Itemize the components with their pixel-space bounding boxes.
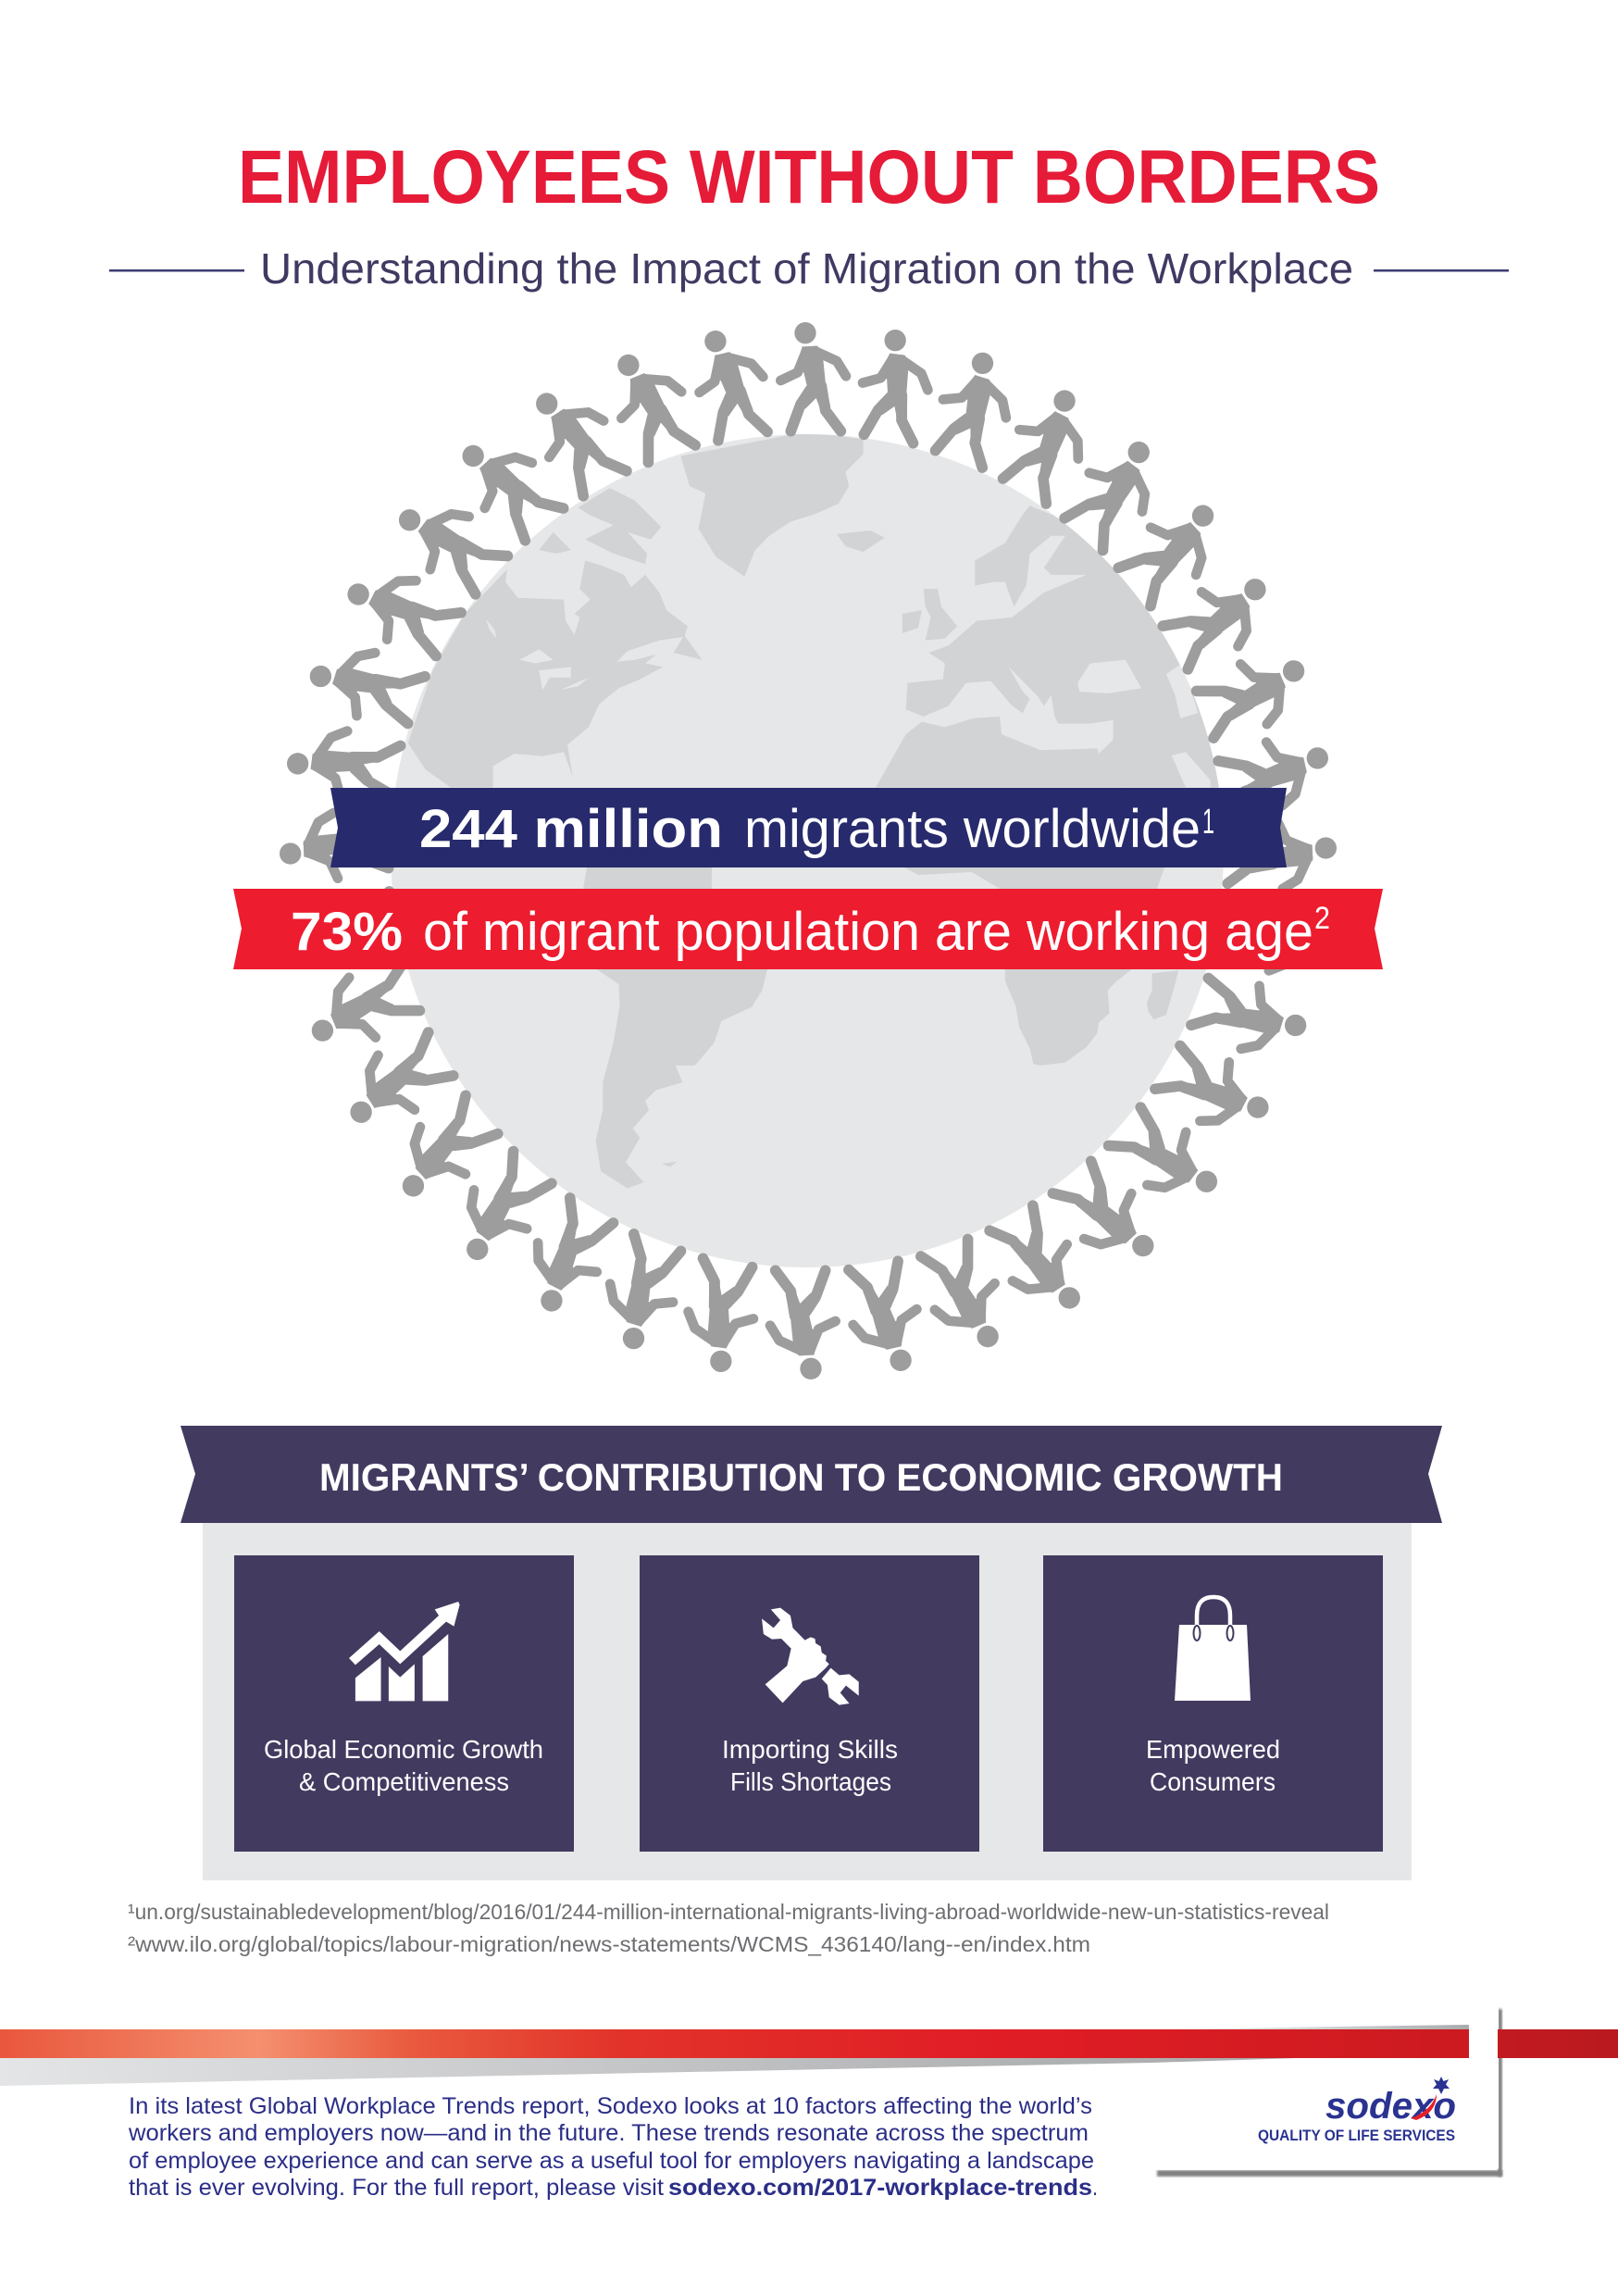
icon: shopping bag xyxy=(1175,1597,1251,1701)
sodexo logo: sodexo xyxy=(1326,2086,1456,2127)
banner: 244 million migrants: 1 xyxy=(1202,803,1214,842)
card: empowered consumers xyxy=(1043,1555,1383,1852)
sodexo logo xyxy=(1258,2077,1456,2144)
red footer bar, right segment xyxy=(1498,2029,1618,2058)
card: empowered consumers: Consumers xyxy=(1150,1767,1276,1796)
subtitle with side rules: Understanding the Impact of Migration on the Workplace xyxy=(260,244,1353,293)
footer paragraph: that is ever evolving. For the full report, please visit xyxy=(129,2175,664,2201)
banner: 244 million migrants: 244 million xyxy=(419,799,723,859)
icon: hand with wrench xyxy=(762,1608,859,1705)
card: importing skills: Fills Shortages xyxy=(730,1767,891,1796)
footnotes: ¹un.org/sustainabledevelopment/blog/2016/01/244-million-international-migrants-living-abroad-worldwide-new-un-statistics-reveal xyxy=(128,1900,1329,1924)
card: importing skills xyxy=(640,1555,979,1852)
title: EMPLOYEES WITHOUT BORDERS xyxy=(238,135,1380,219)
card: empowered consumers: Empowered xyxy=(1146,1735,1280,1764)
footer paragraph: workers and employers now—and in the future. These trends resonate across the spectrum xyxy=(128,2120,1089,2146)
card: global economic growth: & Competitiveness xyxy=(299,1767,509,1796)
footer paragraph: In its latest Global Workplace Trends report, Sodexo looks at 10 factors affecting the world’s xyxy=(129,2093,1092,2119)
section heading ribbon: MIGRANTS’ CONTRIBUTION TO ECONOMIC GROWTH xyxy=(319,1455,1283,1499)
banner: 244 million migrants: migrants worldwide xyxy=(744,799,1201,859)
card: global economic growth xyxy=(234,1555,574,1852)
ring of 36 walking figures xyxy=(280,322,1337,1379)
banner: 73% working age: 73% xyxy=(291,902,403,962)
banner: 73% working age: of migrant population are working age xyxy=(423,902,1313,962)
footnotes: ²www.ilo.org/global/topics/labour-migration/news-statements/WCMS_436140/lang--en/index.htm xyxy=(128,1932,1090,1956)
footer paragraph: sodexo.com/2017-workplace-trends xyxy=(668,2175,1092,2201)
logo card with shadow xyxy=(1155,2006,1502,2177)
sodexo logo: QUALITY OF LIFE SERVICES xyxy=(1258,2128,1455,2144)
card: importing skills: Importing Skills xyxy=(722,1735,898,1764)
footnotes xyxy=(128,1900,1329,1956)
section heading ribbon xyxy=(180,1426,1442,1523)
footer paragraph: . xyxy=(1092,2175,1098,2201)
footer paragraph: of employee experience and can serve as a useful tool for employers navigating a landscape xyxy=(129,2148,1094,2174)
panel background: economic growth xyxy=(203,1523,1412,1880)
banner: 73% working age xyxy=(233,889,1383,969)
globe with continents xyxy=(391,434,1224,1267)
banner: 244 million migrants xyxy=(330,788,1287,867)
icon: rising chart xyxy=(349,1602,460,1701)
red footer bar with grey wedge xyxy=(0,2025,1469,2086)
footer paragraph xyxy=(128,2093,1098,2201)
banner: 73% working age: 2 xyxy=(1314,901,1330,936)
card: global economic growth: Global Economic Growth xyxy=(264,1735,543,1764)
